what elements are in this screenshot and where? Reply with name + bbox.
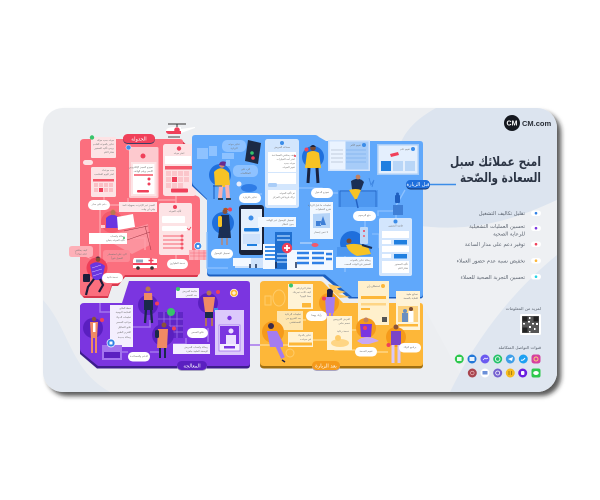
caption: booking: الحجز عبر الإنترنت بسهولة تامة xyxy=(122,204,155,207)
note card with green badge: تذكير بالموعد القادم xyxy=(93,143,114,146)
card: patient chat: موعد جديد xyxy=(284,162,296,165)
benefits list xyxy=(457,210,541,281)
bubble: patient query: الزيارة xyxy=(231,147,238,150)
connector paths xyxy=(207,180,405,272)
bubble: intake: نموذج الدخول xyxy=(315,191,329,194)
bubble: emergency: خدمة الطوارئ xyxy=(170,262,185,265)
bubble: fees: دفع الرسوم xyxy=(358,214,371,217)
card: patient chat: تم تأكيد الموعد xyxy=(279,191,295,195)
card: aftercare note: المستشفى xyxy=(290,321,301,324)
decorative streaks by notch xyxy=(328,284,350,298)
bubble: results: نتائج الفحص xyxy=(191,331,204,334)
card: visit checklist: شكرا لكم xyxy=(398,267,408,270)
icon: medical plus xyxy=(230,289,238,297)
panel: before visit (blue) xyxy=(192,135,423,298)
bubble: loyalty xyxy=(399,343,421,352)
bubble: chat: دعم على مدار xyxy=(91,203,106,206)
bullet: lower costs: تقليل تكاليف التشغيل xyxy=(479,211,526,217)
card: treatment plan: خطة العلاج xyxy=(120,307,131,310)
bubble: walk in xyxy=(102,273,123,283)
caption: booking xyxy=(119,202,157,212)
bubble: reply: الرد على xyxy=(241,168,250,171)
bubble: reply xyxy=(233,165,258,177)
appointment calendar card xyxy=(163,144,196,196)
caption: telehealth xyxy=(336,257,373,268)
icon: reception desk xyxy=(393,192,403,215)
bubble: question xyxy=(69,246,93,259)
card: aftercare note xyxy=(277,311,303,330)
illustration: desk worker xyxy=(101,210,151,254)
icon: smartphone xyxy=(245,140,261,164)
bubble: question two: الرد على استفسار xyxy=(107,253,127,256)
bubble: question: حجز موعد؟ xyxy=(75,252,87,256)
panel: scheduling (red) xyxy=(69,135,208,298)
illustration: woman in purple xyxy=(319,289,339,330)
card: billing xyxy=(288,332,313,347)
label: after visit pill xyxy=(312,361,340,371)
bubble: question two: العميل فوراً xyxy=(111,255,123,260)
bubble: thanks: رأيك يهمنا xyxy=(311,313,322,317)
illustration: woman patient xyxy=(83,317,104,353)
card: patient chat: مساعد المريض xyxy=(274,146,291,149)
label: scheduling pill xyxy=(123,134,155,144)
small pill xyxy=(83,160,93,165)
booking form card: الاسم ورقم الهاتف xyxy=(134,170,153,173)
calendar card: اختر اليوم المناسب xyxy=(94,173,114,176)
illustration: wall charts xyxy=(197,146,234,166)
illustration: man with arm sling xyxy=(138,286,159,323)
card: instructions: لا تنس إحضار xyxy=(313,231,329,234)
bullet: 24/7 support: توفير دعم على مدار الساعة xyxy=(465,242,526,248)
connector paths xyxy=(260,320,388,352)
card: doctor article: للعناية بالصحة xyxy=(404,297,418,300)
caption: follow up: متابعة المريض xyxy=(182,290,198,293)
card: treatment plan: رسالة جديدة xyxy=(118,336,132,339)
bubble: reply: المكالمات xyxy=(240,172,251,175)
card: doctor article: نصائح طبية xyxy=(406,293,418,296)
bubble: thanks xyxy=(306,311,327,321)
title xyxy=(450,155,541,186)
title: امنح عملائك سبل xyxy=(450,155,541,170)
card: billing: في موعده xyxy=(300,338,312,341)
logo: CM.com xyxy=(504,115,552,131)
icon: instagram xyxy=(532,354,540,364)
illustration: walking patient xyxy=(83,256,108,295)
bubble: arrival: تسجيل الوصول xyxy=(214,252,230,255)
bubble: rating xyxy=(355,347,377,356)
logo: CM.com: CM.com xyxy=(522,119,552,128)
heading: channels: قنوات التواصل المتكاملة xyxy=(498,345,541,350)
card: patient chat: اختر أحد الخيارات xyxy=(277,157,295,161)
illustration: cross-legged person xyxy=(356,318,379,344)
calendar card xyxy=(91,167,116,197)
bubble: results xyxy=(187,328,208,338)
label: treatment pill xyxy=(177,361,207,371)
card: aftercare note: بعد الخروج من xyxy=(286,317,301,320)
bullet: improve operations: للرعاية الصحية xyxy=(493,232,525,238)
illustration: hospital building xyxy=(233,232,333,270)
card: visit checklist: قائمة التحضير xyxy=(387,224,403,228)
card: visit checklist xyxy=(379,218,412,276)
card: patient chat xyxy=(265,139,299,208)
icon: QR code xyxy=(520,314,541,335)
card: billing: تذكير بالدواء xyxy=(298,334,311,337)
card: patient chat: كيف يمكنني المساعدة xyxy=(272,154,296,157)
card: feedback message xyxy=(288,284,313,309)
booking form card xyxy=(129,147,158,198)
icon: imessage xyxy=(532,368,540,378)
caption: follow up: بعد الفحص xyxy=(186,294,197,297)
note card with green badge: موعد جديد مؤكد xyxy=(97,139,115,142)
note card with green badge: شكرا لكم xyxy=(104,151,114,154)
illustration: seated woman xyxy=(262,321,285,362)
caption: video visit: تأكيد الموعد بنجاح xyxy=(106,238,125,242)
icon: viber xyxy=(493,368,502,378)
card: treatment plan: مواعيد الفحص xyxy=(116,321,132,324)
panel: treatment (purple) xyxy=(80,281,262,368)
booking form card: نموذج الحجز الإلكتروني xyxy=(129,166,153,169)
card: doctor article xyxy=(396,291,420,330)
card: patient chat: تغيير الموعد xyxy=(282,166,295,169)
bullet: patient experience: تحسين التجربة الصحية للعملاء xyxy=(461,275,526,281)
bullet: improve operations xyxy=(469,224,541,238)
label: treatment pill: المعالجة xyxy=(183,364,201,370)
connector paths xyxy=(100,196,176,262)
caption: video visit xyxy=(89,233,127,244)
card: feedback message: شكرا لزيارتكم xyxy=(296,287,311,290)
bubble: walk in: خدمة ذاتية xyxy=(107,276,118,279)
icon: whatsapp xyxy=(493,354,502,364)
icon: clinic kiosk xyxy=(189,242,208,260)
label: before visit pill: قبل الزيارة xyxy=(407,182,430,188)
label: after visit pill: بعد الزيارة xyxy=(315,364,337,370)
bubble: patient query: تذكير موعد xyxy=(228,143,240,146)
bubble: emergency xyxy=(167,259,188,269)
caption: prescription: رسالة واتساب للمريض xyxy=(184,346,209,349)
card: offers: خصم خاص xyxy=(338,322,350,325)
confirmation card: تأكيد الموعد xyxy=(169,209,182,213)
bubble: question: كيف يمكنني xyxy=(75,249,88,252)
card: patient chat: نراك قريبا في المركز xyxy=(272,196,295,199)
bubble: patient query xyxy=(222,140,246,152)
illustration: woman with bag xyxy=(212,208,234,245)
illustration: window grid xyxy=(158,308,183,338)
card: video consultation xyxy=(215,310,244,355)
icon: apple business xyxy=(518,368,527,378)
background card xyxy=(43,108,557,392)
card: insurance info xyxy=(328,140,370,171)
bubble: ward xyxy=(128,352,150,362)
caption: video visit: رسالة واتساب xyxy=(110,235,126,238)
bullet: reduce no-shows: تخفيض نسبة عدم حضور العملاء xyxy=(457,258,526,264)
bubble: rating: تقييم الخدمة xyxy=(360,350,373,353)
icon: ambulance xyxy=(133,258,157,270)
card: pre-visit survey xyxy=(377,144,419,175)
card: insurance info: تقييم الألم xyxy=(351,143,361,147)
caption: prescription: الوصفة الطبية جاهزة xyxy=(186,350,208,353)
bubble: reminder xyxy=(239,193,261,203)
card: visit checklist: تأكيد الحضور xyxy=(394,262,408,266)
card: survey: استطلاع رأي xyxy=(367,284,380,288)
note card with green badge: يرجى تأكيد الحضور xyxy=(93,146,114,150)
card: feedback message: معنا اليوم؟ xyxy=(300,295,312,298)
card: treatment plan: نتائج التحاليل xyxy=(118,326,131,329)
card: instructions: شرح الخطوات xyxy=(316,208,331,211)
title: السعادة والصّحة xyxy=(460,171,541,186)
card: treatment plan xyxy=(110,305,133,347)
card: survey xyxy=(358,281,389,325)
illustration: man in yellow jacket xyxy=(302,145,324,183)
confirmation card xyxy=(159,203,192,255)
icon: voice xyxy=(506,368,515,378)
illustration: standing man xyxy=(386,324,406,363)
bubble: question two xyxy=(103,250,130,264)
heading: more info: لمزيد من المعلومات xyxy=(506,306,541,311)
card: instructions: تعليمات ما قبل الزيارة xyxy=(308,204,331,207)
caption: online check-in xyxy=(258,217,296,227)
card: aftercare note: تعليمات الرعاية xyxy=(285,313,301,316)
illustration: man with phone xyxy=(198,290,220,326)
appointment calendar card: اختر موعد xyxy=(174,152,185,155)
icon: messenger xyxy=(480,354,490,364)
illustration: hospital bed monitor xyxy=(102,339,122,360)
icon: chat xyxy=(480,368,490,378)
caption: telehealth: رسالة تذكير بالموعد xyxy=(350,259,372,262)
panel: after visit (yellow) xyxy=(260,281,423,368)
card: treatment plan: المتابعة اليومية xyxy=(116,311,131,314)
icon: big smartphone xyxy=(239,205,264,255)
connector: before visit link xyxy=(418,184,456,186)
illustration: woman with phone xyxy=(209,161,257,199)
card: feedback message: كيف كانت تجربتك xyxy=(293,291,312,294)
calendar card: حدد موعدك xyxy=(102,169,114,172)
illustration: wall decor xyxy=(265,290,418,357)
note card with green badge xyxy=(90,135,116,158)
icon: twitter xyxy=(519,354,528,364)
card: instructions xyxy=(308,202,333,239)
bubble: reminder: تذكير بالزيارة xyxy=(243,196,257,199)
icon: rcs xyxy=(455,354,464,364)
bubble: loyalty: برنامج الولاء xyxy=(404,346,417,349)
label: scheduling pill: الجدولة xyxy=(131,136,147,142)
caption: online check-in: تسجيل الوصول عبر الهاتف xyxy=(266,219,294,222)
caption: online check-in: بدون انتظار xyxy=(281,223,294,226)
logo: CM.com: CM xyxy=(507,120,518,128)
icon: record xyxy=(468,368,477,378)
helicopter icon xyxy=(166,124,195,138)
card: pre-visit survey: تقييم عام xyxy=(400,148,410,151)
bullet: improve operations: تحسين العمليات التشغيلية xyxy=(469,224,526,230)
caption: follow up xyxy=(176,287,199,298)
illustration: person with backpack xyxy=(152,322,176,358)
bubble: chat xyxy=(88,200,110,210)
bubble: arrival xyxy=(211,249,233,258)
card: offers: العرض الترويجي xyxy=(333,318,350,321)
caption: prescription xyxy=(173,344,210,354)
illustration: person relaxing on sofa xyxy=(337,227,379,256)
caption: telehealth: الحضور في الوقت المحدد xyxy=(344,263,371,266)
card: offers: خدمة رعاية xyxy=(337,330,349,333)
icon: blue badge xyxy=(126,145,131,150)
icon: sms xyxy=(468,354,476,364)
card: treatment plan: تعليمات الدواء xyxy=(116,316,131,319)
bubble: ward: الدعم والمساعدة xyxy=(130,355,148,358)
channel icons xyxy=(455,354,540,378)
icon: telegram xyxy=(506,354,515,364)
connector paths xyxy=(100,303,262,352)
card: treatment plan: التقرير الطبي xyxy=(117,331,131,334)
caption: booking: وفي أي وقت xyxy=(141,207,156,211)
card: offers xyxy=(327,316,352,350)
bubble: intake xyxy=(311,188,333,198)
bubble: fees xyxy=(353,211,376,221)
illustration: woman at desk xyxy=(338,175,378,208)
label: before visit pill xyxy=(406,180,430,190)
